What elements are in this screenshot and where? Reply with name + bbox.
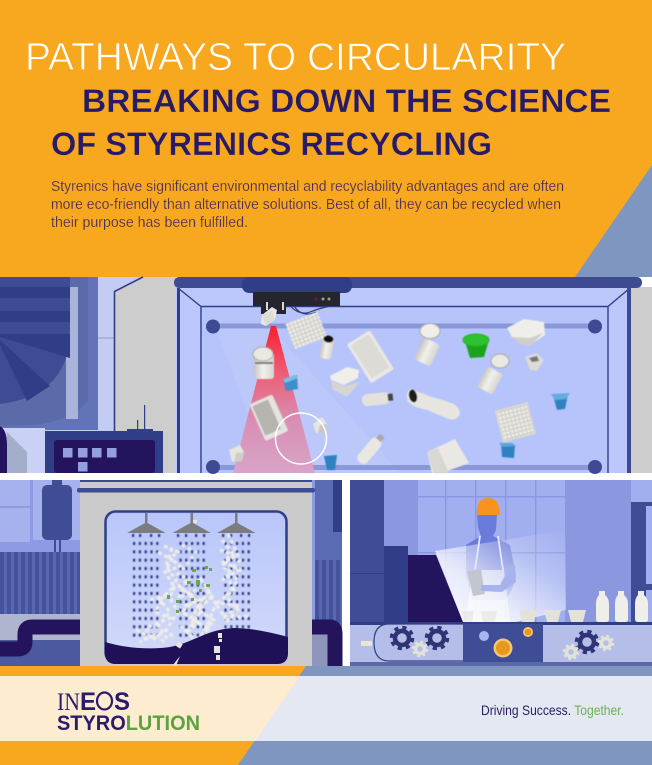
logo: E — [80, 688, 96, 716]
scanner beam — [233, 326, 315, 473]
plastic flakes — [136, 534, 250, 642]
scan target ring — [276, 413, 326, 464]
footer — [0, 666, 652, 765]
rails and bolts — [206, 320, 602, 474]
sorted objects — [229, 312, 570, 473]
spiral stair structure — [0, 277, 114, 432]
header blue corner — [575, 165, 652, 277]
bottle 2 — [355, 432, 387, 466]
left radiator — [0, 552, 80, 614]
lower left machine — [0, 426, 45, 473]
tank silhouette — [42, 480, 72, 552]
footer light strip — [0, 676, 652, 741]
intro text: more eco-friendly than alternative solutions. Best of all, they can be recycled when — [51, 197, 561, 213]
tray 2 — [347, 330, 394, 383]
background — [350, 480, 652, 666]
clamshell 2 — [330, 367, 360, 397]
bottles — [596, 591, 648, 622]
sludge — [105, 628, 288, 664]
subtitle: OF STYRENICS RECYCLING — [51, 126, 492, 162]
panel: production line — [350, 480, 652, 666]
logo: IN — [57, 689, 80, 716]
grey machine body — [80, 482, 312, 666]
clamshell — [507, 319, 545, 346]
worker — [466, 498, 516, 600]
title: PATHWAYS TO CIRCULARITY — [25, 36, 566, 79]
grey wall — [114, 277, 176, 473]
left background — [0, 277, 176, 473]
green cup — [463, 334, 489, 358]
scanner unit — [253, 292, 340, 326]
big bottle — [407, 389, 460, 420]
falling flakes — [173, 520, 222, 666]
white box — [427, 439, 469, 473]
glass light panel — [435, 530, 566, 622]
mesh tray — [285, 312, 327, 349]
window grid — [418, 480, 565, 622]
chamber glass — [176, 287, 631, 473]
logo — [57, 688, 200, 735]
bottle cap — [408, 389, 418, 403]
cut-off cup — [319, 335, 335, 360]
panel: washing tank — [0, 480, 342, 666]
green flakes — [167, 566, 212, 613]
lid and cup 2 — [476, 354, 509, 395]
conveyor gears — [392, 628, 613, 659]
left column — [350, 480, 384, 622]
tagline: Driving Success. Together. — [481, 702, 624, 718]
subtitle: BREAKING DOWN THE SCIENCE — [82, 83, 611, 119]
mesh tray 2 — [496, 403, 535, 441]
white cubes — [229, 417, 327, 462]
top rail — [174, 277, 642, 288]
intro text: Styrenics have significant environmental and recyclability advantages and are often — [51, 179, 564, 195]
tank window — [106, 512, 286, 662]
apron and clipboard — [465, 536, 516, 622]
blue cup 2 — [499, 443, 516, 458]
header background — [0, 0, 652, 277]
footer cream strip — [0, 676, 300, 741]
right column — [566, 480, 652, 622]
footer blue base — [0, 666, 652, 765]
light gears — [413, 636, 613, 659]
small bottle — [361, 391, 394, 407]
control console — [45, 405, 163, 473]
dark gears — [392, 628, 598, 652]
blue cup 3 — [324, 455, 337, 470]
intro text — [51, 179, 564, 231]
conveyor belt — [350, 622, 652, 666]
background windows — [0, 480, 80, 542]
logo: STYROLUTION — [57, 712, 200, 735]
water drops — [132, 534, 251, 642]
cups — [462, 610, 586, 622]
footer orange band — [0, 666, 306, 765]
dark pipes — [0, 627, 335, 666]
lid and cup — [414, 324, 440, 367]
panel: optical sorting chamber — [0, 277, 652, 474]
logo: S — [114, 688, 130, 716]
right radiator — [315, 560, 342, 630]
control lights — [479, 627, 533, 658]
blue cup — [551, 393, 570, 410]
tray — [249, 394, 288, 441]
dark hood — [408, 555, 463, 622]
subtitle — [51, 83, 611, 162]
small square cup — [525, 353, 544, 371]
right grey wall — [631, 287, 652, 473]
blue cube — [283, 375, 298, 391]
cup — [253, 347, 274, 379]
background — [0, 480, 342, 666]
shower heads — [127, 513, 256, 533]
intro text: their purpose has been fulfilled. — [51, 215, 248, 231]
conveyor products — [462, 591, 648, 622]
